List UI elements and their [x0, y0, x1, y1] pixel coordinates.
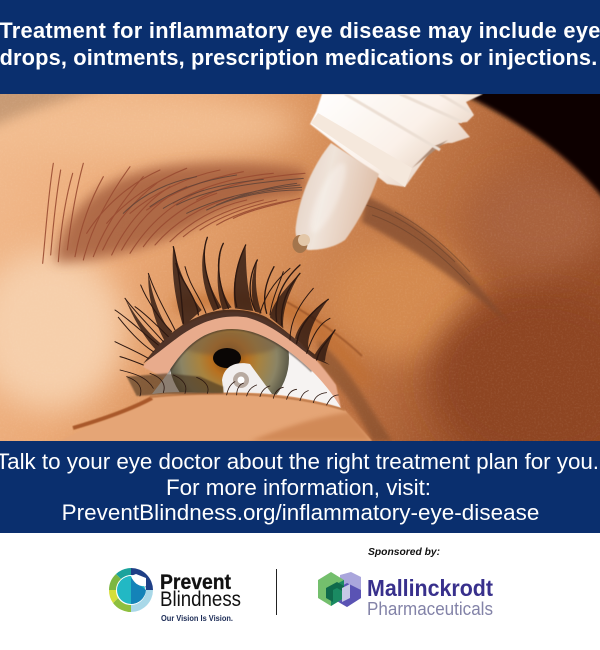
logo wordmark: Our Vision Is Vision. [161, 614, 233, 623]
company wordmark: Pharmaceuticals [367, 599, 493, 619]
bottom banner: call to action [0, 441, 600, 533]
company wordmark: Mallinckrodt [367, 575, 493, 601]
bottom banner: call to action: PreventBlindness.org/inflammatory-eye-disease [62, 500, 539, 525]
top banner: treatment message: Treatment for inflammatory eye disease may include eye [0, 18, 600, 43]
upper lid crease [175, 292, 375, 385]
bottom banner: call to action: Talk to your eye doctor about the right treatment plan for you. [0, 449, 599, 474]
logo: Mallinckrodt Pharmaceuticals [318, 572, 493, 619]
lash clumps [125, 237, 335, 365]
skin [0, 80, 600, 470]
logo wordmark [160, 571, 241, 623]
top banner: treatment message: drops, ointments, prescription medications or injections. [0, 45, 597, 70]
hair [462, 80, 600, 210]
top banner: treatment message [0, 0, 600, 94]
logo: Prevent Blindness [109, 568, 241, 623]
drop [292, 235, 308, 253]
bottom banner: call to action: For more information, visit: [166, 475, 431, 500]
nozzle [296, 143, 379, 250]
eyeball [152, 329, 341, 408]
logo wordmark: Prevent [160, 571, 231, 594]
photo: eye drop being applied to an eye [0, 94, 600, 441]
lower lashes [127, 373, 223, 396]
sponsored by label: Sponsored by: [368, 547, 440, 558]
lower eyelid [60, 393, 372, 441]
eyelid rim [143, 312, 341, 408]
logo mark: segmented ring and eye [109, 568, 153, 612]
logo wordmark: Blindness [160, 588, 241, 611]
bottle cap [310, 94, 483, 187]
eyebrow [43, 163, 510, 325]
divider between logos [276, 569, 277, 615]
eye [60, 237, 392, 441]
logo mark: interlocking hexagons [318, 572, 361, 607]
eyelashes [115, 237, 338, 405]
eye drop bottle [292, 94, 483, 253]
company wordmark [367, 575, 493, 619]
